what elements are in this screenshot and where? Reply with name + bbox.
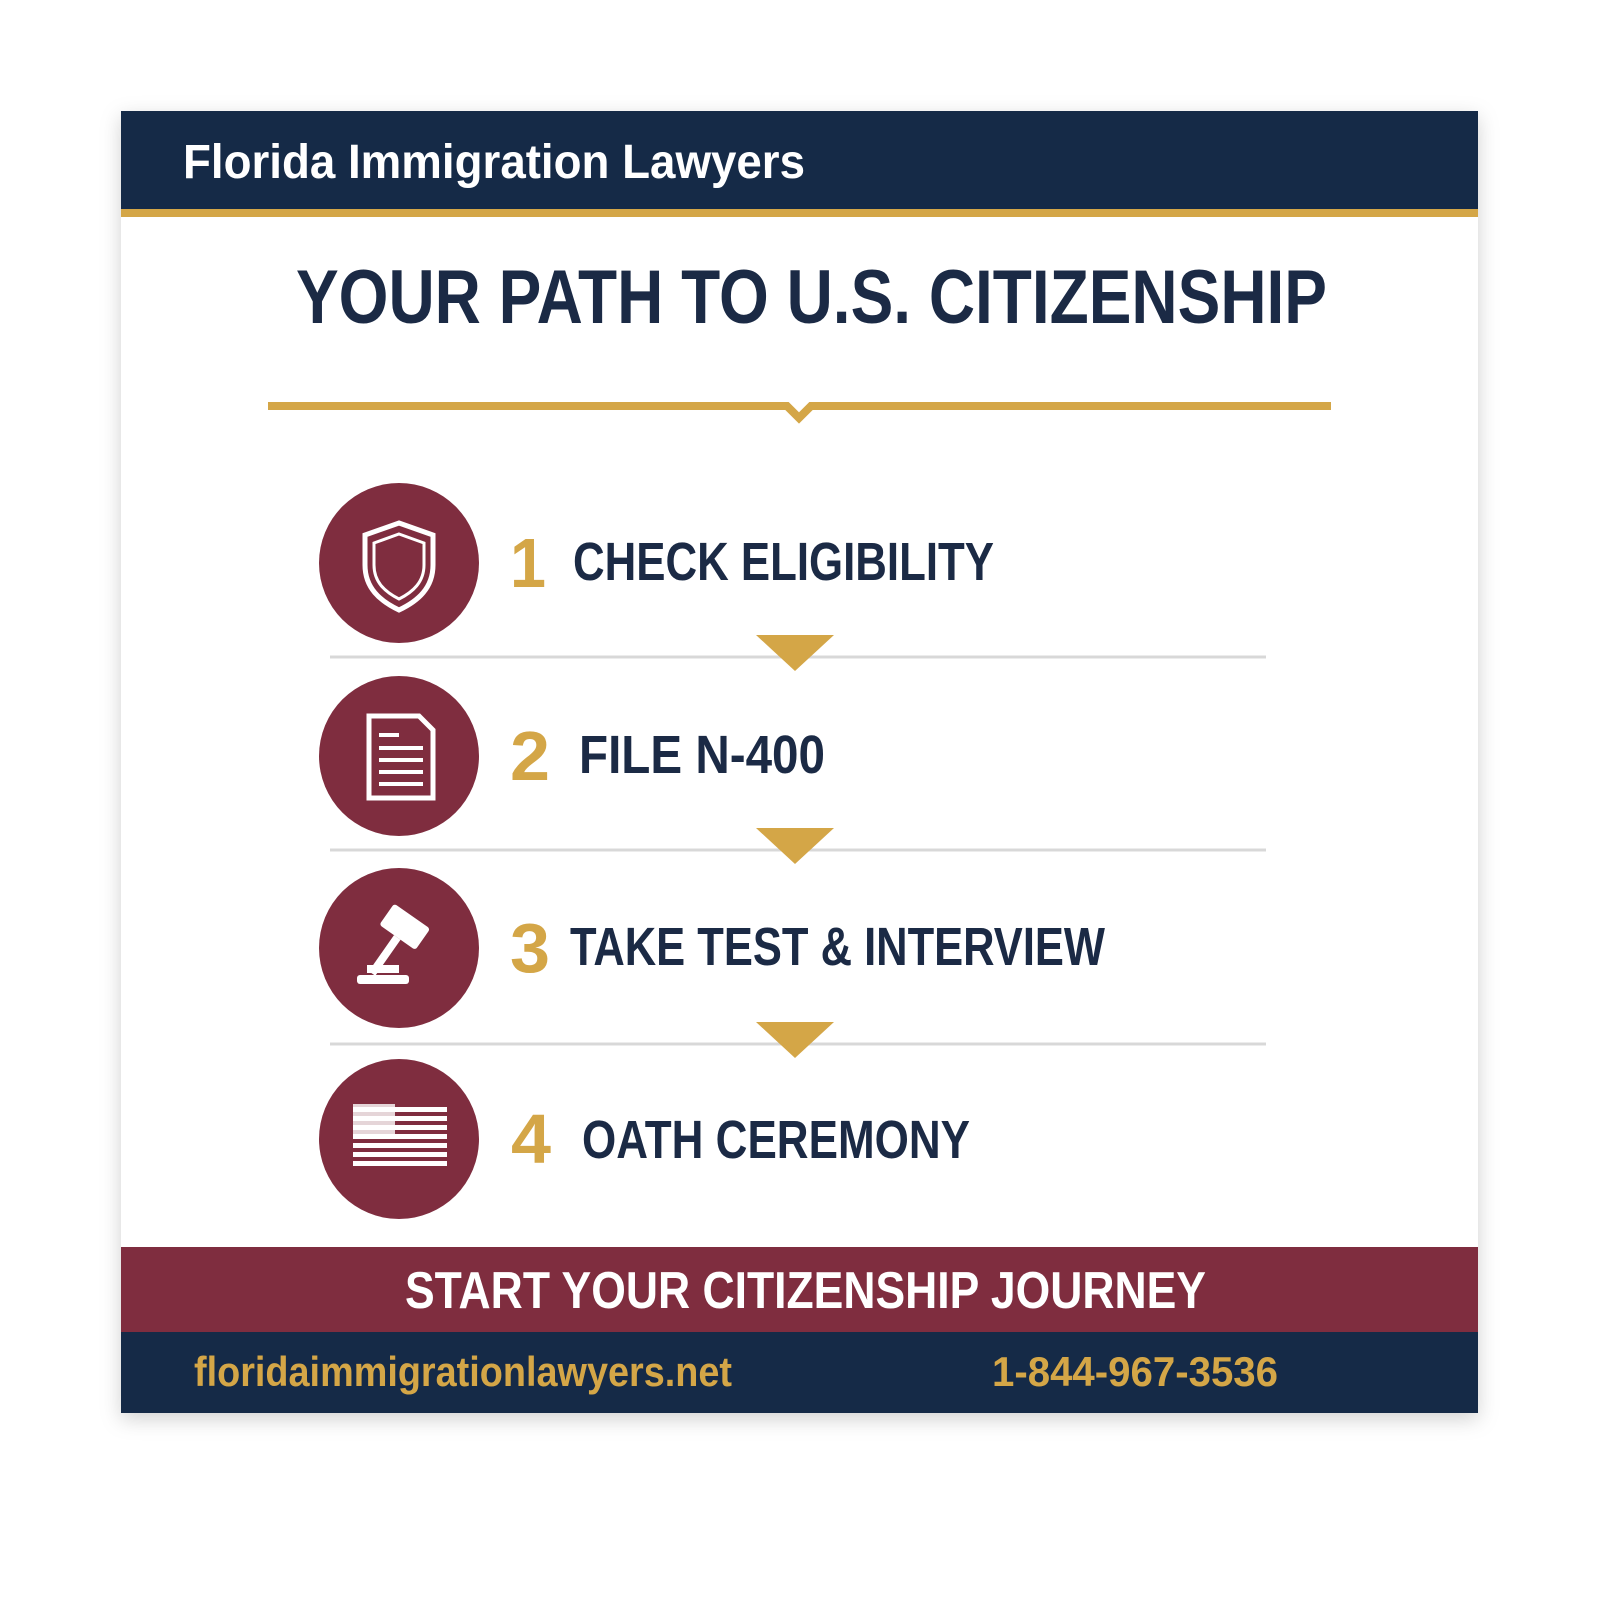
icon: shield bbox=[319, 483, 479, 643]
card bbox=[121, 111, 1478, 1413]
label 3: TAKE TEST & INTERVIEW bbox=[570, 917, 1105, 977]
label 1: CHECK ELIGIBILITY bbox=[573, 532, 994, 592]
title divider bbox=[268, 406, 1331, 418]
arrow 2 bbox=[756, 828, 834, 864]
step 1 bbox=[319, 483, 994, 643]
phone: 1-844-967-3536 bbox=[992, 1348, 1278, 1395]
icon: flag bbox=[319, 1059, 479, 1219]
number 1: 1 bbox=[510, 524, 546, 602]
cta banner: START YOUR CITIZENSHIP JOURNEY bbox=[405, 1262, 1206, 1320]
arrow 3 bbox=[756, 1022, 834, 1058]
icon: gavel bbox=[319, 868, 479, 1028]
label 2: FILE N-400 bbox=[579, 725, 825, 785]
cta banner bbox=[121, 1247, 1478, 1332]
step 4 bbox=[319, 1059, 970, 1219]
number 4: 4 bbox=[511, 1100, 551, 1178]
footer bbox=[121, 1332, 1478, 1413]
arrow 1 bbox=[756, 635, 834, 671]
title: YOUR PATH TO U.S. CITIZENSHIP bbox=[296, 255, 1327, 340]
website: floridaimmigrationlawyers.net bbox=[194, 1348, 732, 1395]
icon: document bbox=[319, 676, 479, 836]
header text: Florida Immigration Lawyers bbox=[183, 136, 805, 189]
number 3: 3 bbox=[510, 909, 550, 987]
step 3 bbox=[319, 868, 1105, 1028]
header bar bbox=[121, 111, 1478, 217]
label 4: OATH CEREMONY bbox=[582, 1110, 970, 1170]
number 2: 2 bbox=[510, 717, 550, 795]
step 2 bbox=[319, 676, 825, 836]
separators bbox=[330, 657, 1266, 1044]
